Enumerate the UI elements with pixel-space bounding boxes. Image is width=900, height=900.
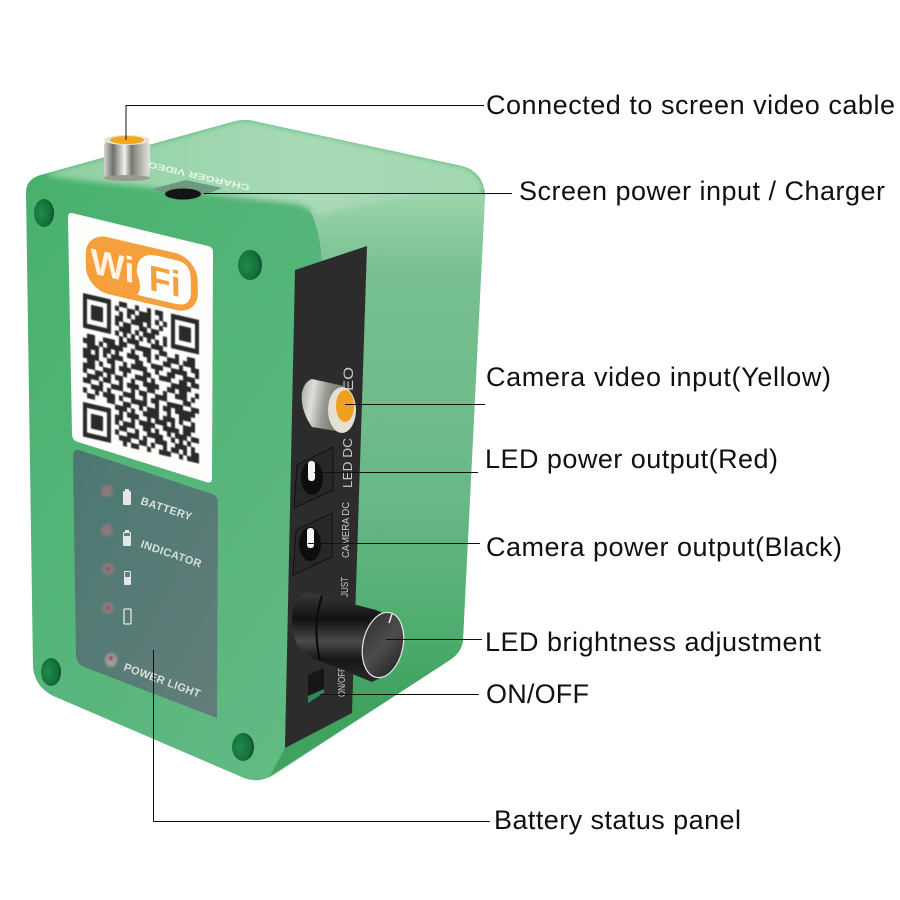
LED power socket — [294, 447, 333, 508]
callout: LED power output: LED power output(Red) — [485, 444, 778, 474]
camera power socket — [293, 513, 332, 575]
callout: battery status panel: Battery status panel — [494, 805, 741, 835]
callout: battery status panel — [154, 650, 741, 835]
screw hole: bottom left — [41, 658, 61, 686]
right side face — [270, 180, 485, 776]
text: INDICATOR: INDICATOR — [139, 538, 203, 571]
LED indicators — [101, 485, 117, 667]
infographic: device with callouts — [26, 94, 894, 834]
battery status panel — [73, 450, 218, 718]
ON/OFF switch — [308, 668, 324, 703]
screw hole: bottom right — [232, 733, 254, 761]
panel text: ON/OFF: ON/OFF — [337, 667, 348, 697]
callout: camera power output: Camera power output(Black) — [486, 532, 842, 562]
charger socket — [152, 180, 222, 200]
callout: camera video input: Camera video input(Yellow) — [486, 362, 831, 392]
panel text: VIDEO: EO — [340, 367, 356, 391]
callout: video cable — [126, 90, 895, 140]
panel text: ADJUST: JUST — [340, 577, 351, 597]
QR code — [83, 293, 199, 464]
text: BATTERY: BATTERY — [139, 495, 194, 523]
panel text: CAMERA DC: CAMERA DC — [341, 502, 352, 558]
camera video input jack — [302, 379, 356, 433]
screw hole: top left — [34, 199, 54, 227]
device: green box — [26, 120, 485, 780]
top connector: RCA — [104, 135, 150, 181]
screw hole: top right — [238, 250, 262, 280]
callout: LED brightness: LED brightness adjustment — [485, 627, 821, 657]
battery icons — [123, 489, 131, 624]
WiFi logo — [85, 232, 198, 315]
WiFi QR label — [68, 213, 213, 482]
callout: video cable: Connected to screen video cable — [486, 90, 895, 120]
top marking text: CHARGER VIDEO — [146, 160, 250, 193]
callout: screen power: Screen power input / Charger — [519, 176, 885, 206]
WiFi logo: Wi — [90, 241, 135, 291]
WiFi logo: Fi — [148, 257, 181, 305]
top face — [44, 120, 485, 216]
panel text: LED DC: LED DC — [340, 438, 355, 488]
black side panel — [285, 246, 409, 748]
brightness knob — [292, 592, 409, 682]
callout: ON/OFF: ON/OFF — [486, 679, 589, 709]
text: POWER LIGHT: POWER LIGHT — [122, 662, 202, 700]
